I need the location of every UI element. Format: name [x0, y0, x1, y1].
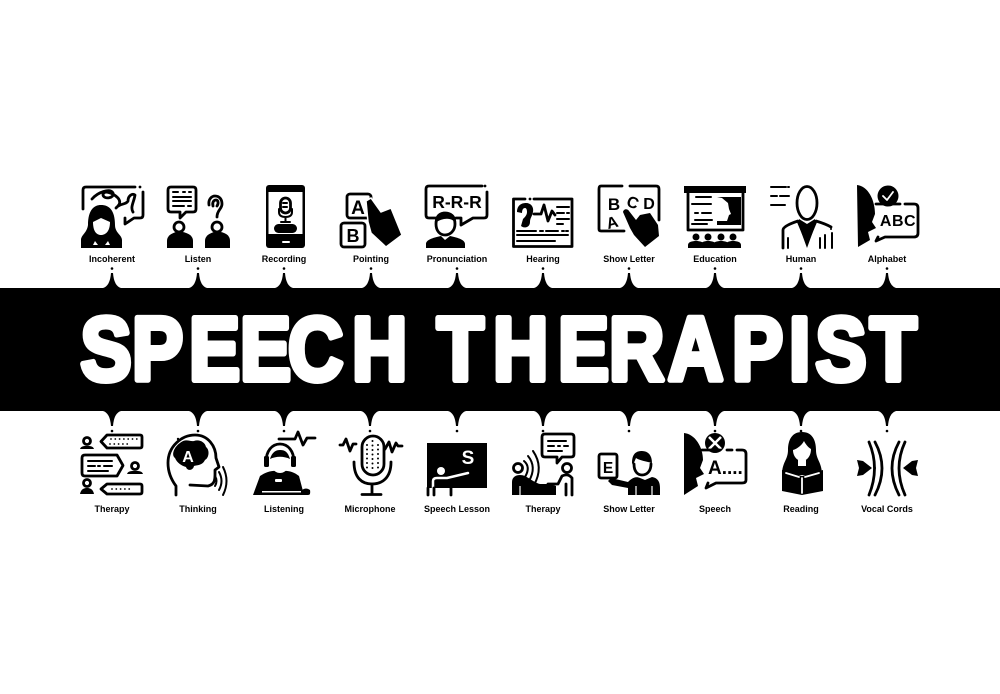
- icon: show letter top: [599, 186, 659, 247]
- icon: recording: [266, 185, 305, 248]
- icon: hearing: [514, 198, 572, 246]
- label: show letter top: Show Letter: [603, 254, 655, 264]
- icon: show letter bottom: [599, 451, 660, 495]
- title band: [0, 267, 1000, 432]
- label: reading: Reading: [783, 504, 819, 514]
- icon: thinking: A: [182, 449, 194, 466]
- icon: pointing: B: [346, 226, 360, 246]
- label: education: Education: [693, 254, 737, 264]
- icon: vocal cords: [857, 442, 918, 495]
- icon: speech lesson: [427, 443, 487, 495]
- icon: pointing: A: [351, 198, 365, 219]
- icon: therapy consultation: [512, 434, 574, 495]
- icon: show letter bottom: E: [603, 460, 613, 477]
- icon: listen: [167, 187, 230, 248]
- label: speech lesson: Speech Lesson: [424, 504, 490, 514]
- icon: show letter top: D: [643, 196, 655, 213]
- label: alphabet: Alphabet: [868, 254, 906, 264]
- title: [80, 298, 917, 399]
- icon: show letter top: C: [624, 193, 641, 214]
- label: therapy consultation: Therapy: [525, 504, 561, 514]
- icon: pronunciation: R-R-R: [432, 192, 482, 212]
- icon: speech: A....: [708, 458, 743, 479]
- label: vocal cords: Vocal Cords: [861, 504, 913, 514]
- label: recording: Recording: [262, 254, 306, 264]
- title: SPEECH: [80, 298, 407, 399]
- icon: show letter top: B: [608, 195, 620, 214]
- label: therapy top bubbles: Therapy: [94, 504, 130, 514]
- label: pointing: Pointing: [353, 254, 389, 264]
- label: thinking: Thinking: [179, 504, 217, 514]
- icon: education: [684, 186, 746, 248]
- icon: listening: [253, 432, 315, 495]
- label: listening: Listening: [264, 504, 304, 514]
- label: microphone: Microphone: [344, 504, 396, 514]
- icon: thinking: [168, 435, 226, 495]
- icon: reading: [782, 432, 823, 495]
- icon: speech lesson: S: [462, 448, 474, 469]
- icon: speech: [684, 433, 746, 495]
- label: pronunciation: Pronunciation: [427, 254, 487, 264]
- icon: therapy top bubbles: [80, 435, 143, 494]
- icon: pronunciation: [426, 185, 487, 248]
- label: speech: Speech: [699, 504, 731, 514]
- label: human: Human: [786, 254, 816, 264]
- icon: human: [771, 186, 832, 248]
- label: show letter bottom: Show Letter: [603, 504, 655, 514]
- label: hearing: Hearing: [526, 254, 560, 264]
- icon: alphabet: [857, 185, 918, 247]
- title: THERAPIST: [437, 298, 917, 399]
- label: listen: Listen: [185, 254, 211, 264]
- icon: alphabet: ABC: [880, 213, 916, 230]
- icon: incoherent: [81, 186, 143, 248]
- icon: show letter top: A: [605, 214, 621, 233]
- icon: pointing: [341, 194, 402, 247]
- icon: microphone: [340, 436, 402, 494]
- label: incoherent: Incoherent: [89, 254, 135, 264]
